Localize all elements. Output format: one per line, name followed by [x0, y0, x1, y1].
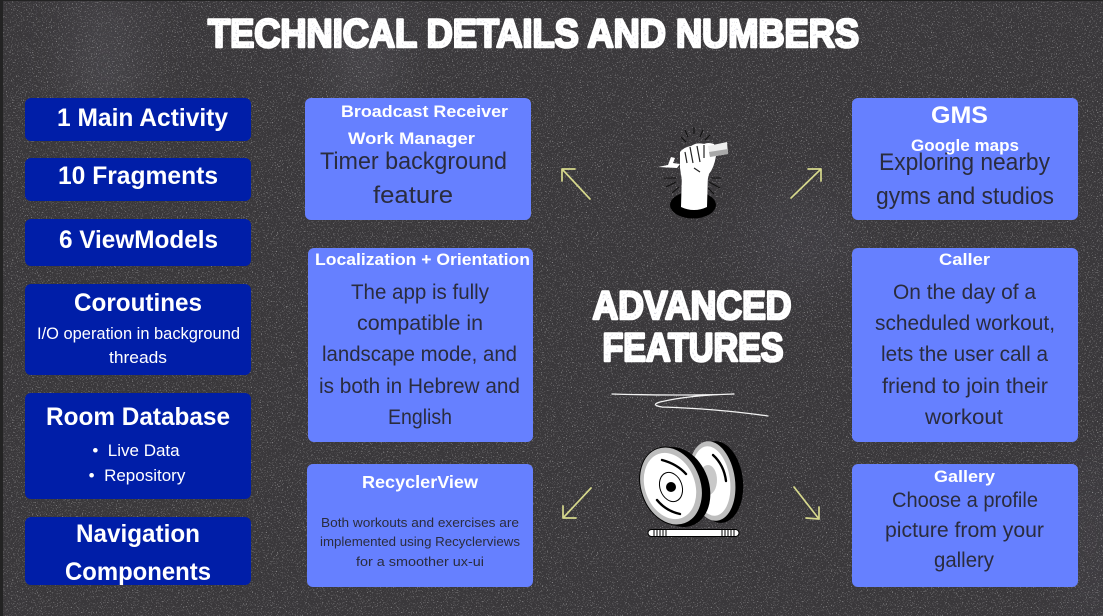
panel: navigation components [25, 517, 251, 586]
panel: coroutines: Coroutines [74, 289, 202, 317]
panel: broadcast receiver: Timer background [320, 148, 507, 175]
panel: 6 viewmodels [25, 219, 251, 266]
panel: coroutines: threads [109, 348, 167, 367]
panel: gms: GMS [931, 102, 988, 129]
icon: weight plates [629, 438, 747, 536]
panel: recyclerview: Both workouts and exercises are [321, 516, 519, 530]
panel: gallery [852, 464, 1078, 587]
title: TECHNICAL DETAILS AND NUMBERS [208, 12, 859, 56]
panel: recyclerview: for a smoother ux-ui [356, 555, 484, 569]
panel: caller: friend to join their [882, 374, 1048, 398]
panel: broadcast receiver [305, 98, 531, 220]
panel: recyclerview [307, 464, 533, 587]
panel: caller: workout [924, 405, 1003, 429]
panel: coroutines: I/O operation in background [37, 324, 240, 343]
arrow: down right [794, 487, 819, 519]
panel: gms: gyms and studios [876, 183, 1054, 210]
icon: fist holding lightning [658, 127, 728, 218]
panel: broadcast receiver: feature [373, 182, 453, 209]
panel: localization and orientation: Localization + Orientation [315, 250, 530, 269]
panel: localization and orientation: The app is fully [351, 280, 489, 304]
panel: localization and orientation [308, 248, 533, 442]
panel: gallery: gallery [934, 549, 994, 572]
panel: 1 main activity [25, 98, 251, 141]
panel: 6 viewmodels: 6 ViewModels [59, 226, 218, 254]
panel: caller [852, 248, 1078, 442]
panel: caller: lets the user call a [881, 342, 1048, 366]
panel: 1 main activity: 1 Main Activity [57, 104, 228, 132]
panel: recyclerview: implemented using Recyclerviews [320, 535, 520, 549]
panel: 10 fragments: 10 Fragments [58, 162, 218, 190]
panel: coroutines [25, 284, 251, 375]
panel: gms [852, 98, 1078, 220]
panel: caller: Caller [939, 250, 990, 269]
panel: room database [25, 393, 251, 499]
panel: localization and orientation: landscape mode, and [322, 342, 517, 366]
panel: localization and orientation: compatible in [357, 311, 483, 335]
panel: room database: Room Database [46, 403, 230, 431]
central heading: advanced features: FEATURES [602, 326, 784, 370]
panel: gallery: Gallery [934, 467, 996, 486]
panel: gms: Exploring nearby [879, 149, 1050, 176]
panel: navigation components: Components [65, 558, 211, 586]
panel: gallery: picture from your [885, 519, 1044, 542]
central heading: advanced features [592, 284, 792, 370]
panel: 10 fragments [25, 158, 251, 201]
panel: recyclerview: RecyclerView [362, 472, 478, 492]
panel: caller: On the day of a [893, 280, 1036, 304]
arrow: down left [563, 488, 591, 518]
panel: localization and orientation: is both in Hebrew and [319, 374, 520, 398]
central heading: advanced features: ADVANCED [592, 284, 792, 328]
panel: room database: • Live Data [92, 441, 180, 460]
panel: room database: • Repository [89, 466, 186, 485]
panel: broadcast receiver: Broadcast Receiver [341, 102, 508, 121]
arrow: up left [562, 169, 590, 199]
panel: localization and orientation: English [388, 405, 452, 429]
panel: gallery: Choose a profile [892, 489, 1038, 512]
panel: navigation components: Navigation [76, 520, 200, 548]
chalk scribble [612, 394, 768, 416]
panel: caller: scheduled workout, [875, 311, 1055, 335]
panel: broadcast receiver: Work Manager [348, 129, 475, 148]
panel: gms: Google maps [911, 136, 1019, 155]
arrow: up right [791, 169, 821, 198]
